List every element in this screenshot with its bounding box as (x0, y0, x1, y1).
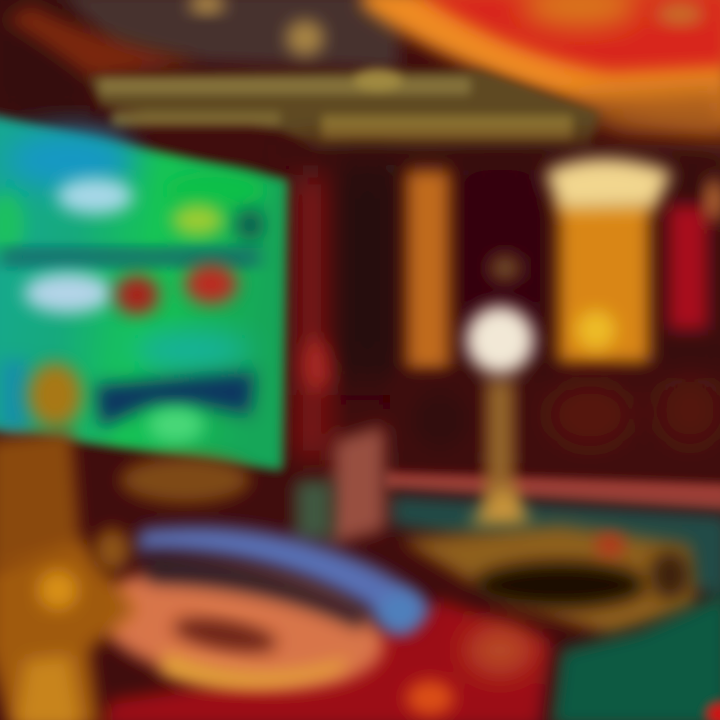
roulette: wheel with blue rim and salmon centre (88, 527, 430, 706)
floor: salmon rail and teal table edge (385, 472, 720, 600)
column: narrow gold pillar (406, 170, 450, 370)
figure: pinkish reflection near table (295, 425, 385, 545)
tray: gold dish below screen (119, 456, 251, 504)
wall: red panel at right (668, 178, 720, 330)
table: gold chips and dark cards (400, 525, 695, 635)
seating: dark maroon row (390, 374, 720, 463)
roulette: red base (100, 600, 550, 720)
lamp: white globe on gold stem (466, 254, 534, 525)
signage: gold lettering band (88, 69, 600, 150)
ceiling: dark panel with lights (0, 0, 400, 120)
ceiling: orange and red chandelier canopy (362, 0, 720, 150)
wall: dark red column section (290, 145, 720, 460)
statue: gold figure foreground (0, 363, 135, 720)
column: wide gold pillar with cream top (545, 158, 672, 363)
screen: green slot machine display (0, 115, 287, 470)
table: green felt corner (550, 590, 720, 720)
